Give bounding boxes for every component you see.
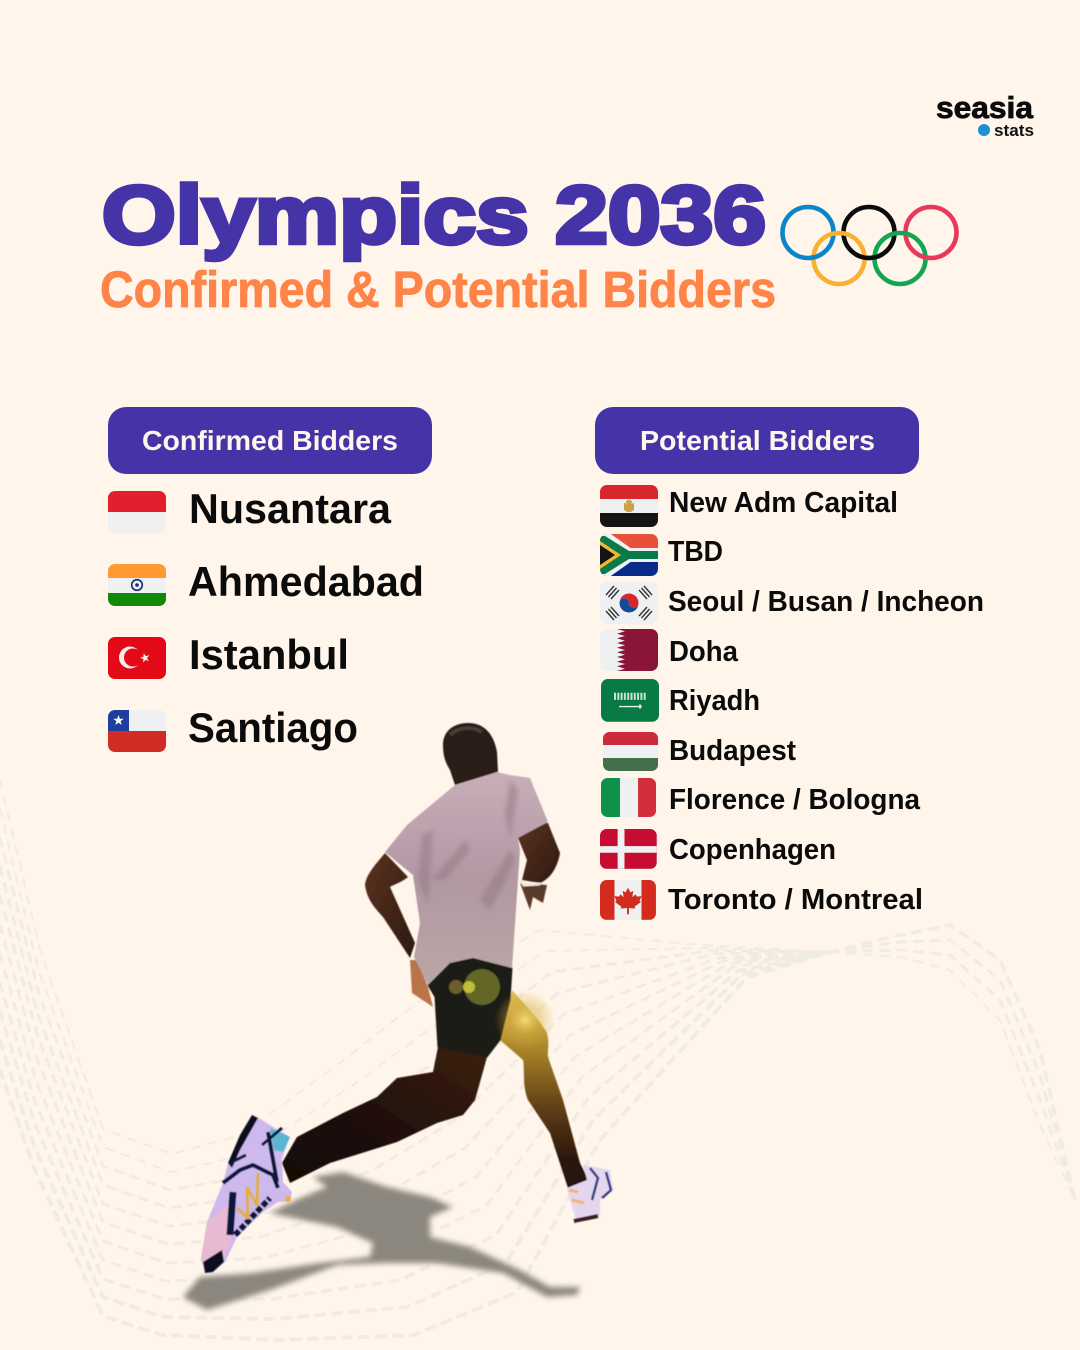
right hand (520, 883, 547, 910)
city: Budapest: Budapest (669, 735, 796, 767)
header: potential bidders: Potential Bidders (640, 425, 875, 456)
city: Toronto / Montreal: Toronto / Montreal (668, 884, 923, 916)
city: Ahmedabad: Ahmedabad (188, 558, 424, 605)
right shoe (567, 1165, 613, 1223)
shirt folds (418, 780, 518, 910)
front leg (500, 990, 590, 1188)
header: confirmed bidders: Confirmed Bidders (142, 425, 398, 456)
shorts (428, 958, 512, 1057)
city: Istanbul: Istanbul (189, 631, 349, 678)
shirt (385, 772, 548, 985)
flag: Qatar (600, 629, 658, 671)
city: Doha: Doha (669, 636, 739, 668)
flag: Egypt (600, 485, 658, 527)
header: potential bidders (595, 407, 919, 474)
city: Riyadh: Riyadh (669, 685, 760, 717)
city: Copenhagen: Copenhagen (669, 834, 836, 866)
rear leg (282, 1047, 487, 1183)
illustration: runner (201, 723, 613, 1273)
logo: seasia stats: seasia (936, 90, 1034, 125)
city: Florence / Bologna: Florence / Bologna (669, 784, 921, 816)
wristband (520, 880, 540, 885)
flag: Chile (108, 710, 166, 752)
flag: Denmark (600, 829, 657, 869)
flag: Indonesia (108, 491, 166, 533)
left shoe (201, 1115, 292, 1273)
flag: India (108, 564, 166, 606)
flag: South Africa (600, 532, 658, 578)
flag: South Korea (600, 582, 658, 624)
right arm (518, 823, 560, 883)
logo: seasia stats: stats (994, 121, 1034, 140)
subtitle: Confirmed & Potential Bidders (100, 261, 776, 318)
flag: Italy (601, 778, 656, 817)
head highlight (450, 728, 482, 735)
flag: Hungary (603, 732, 658, 771)
icon: olympic rings (782, 207, 956, 284)
logo: seasia stats (936, 90, 1034, 140)
flag: Turkey (108, 637, 166, 679)
header: confirmed bidders (108, 407, 432, 474)
left hand (410, 960, 433, 1007)
left arm (365, 853, 415, 958)
city: New Adm Capital: New Adm Capital (669, 487, 898, 519)
head and neck (443, 723, 498, 785)
flag: Saudi Arabia (601, 679, 659, 722)
panel: confirmed bidders (108, 407, 432, 752)
city: Seoul / Busan / Incheon: Seoul / Busan / Incheon (668, 586, 984, 618)
lens flare (449, 969, 555, 1050)
flag: Canada (600, 880, 656, 920)
city: TBD: TBD (668, 536, 723, 568)
shadow of the runner (183, 1172, 580, 1310)
city: Santiago: Santiago (188, 704, 358, 751)
panel: potential bidders (595, 407, 984, 920)
title: Olympics 2036 (102, 170, 766, 261)
city: Nusantara: Nusantara (189, 485, 392, 532)
